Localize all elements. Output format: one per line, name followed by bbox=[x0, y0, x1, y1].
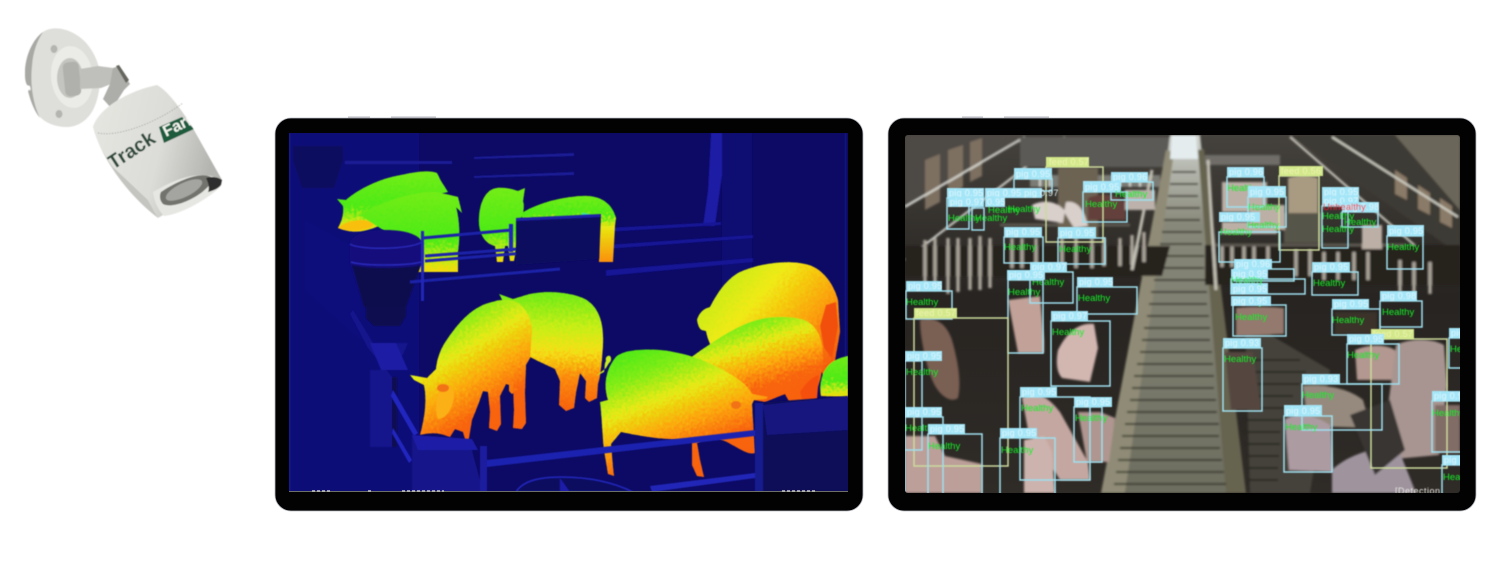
detection: pig middle right: pig 0.95 bbox=[1233, 284, 1267, 294]
detection: pig group top: Healthy bbox=[1115, 189, 1147, 200]
icon: security camera with TrackFarm branding bbox=[25, 28, 222, 218]
thermal pigs lower row bbox=[410, 262, 848, 477]
pigs in pens bbox=[905, 182, 1460, 493]
detection: pig lower right: Healthy bbox=[1450, 344, 1482, 355]
thermal rails and front blocks bbox=[412, 396, 848, 492]
detection: pig middle right: Healthy bbox=[1235, 312, 1267, 323]
pig: upper centre rear view bbox=[479, 188, 525, 262]
detection: pig row two: Healthy bbox=[1008, 287, 1040, 298]
detection: pig row two: Healthy bbox=[1032, 277, 1064, 288]
detection: pig group top right: Healthy bbox=[1387, 242, 1419, 253]
detection: pig group top right: pig 0.97 bbox=[1324, 196, 1358, 206]
pig: upper left rear bbox=[337, 171, 448, 232]
tablet 2 frame bbox=[888, 118, 1476, 511]
feed towers bbox=[1058, 168, 1322, 243]
detection: pig lower right bbox=[1223, 328, 1482, 505]
detection: pig group top: pig 0.96 bbox=[1113, 172, 1147, 182]
detection: pig lower left: pig 0.95 bbox=[930, 424, 964, 434]
detection: pig middle right: pig 0.95 bbox=[1233, 269, 1267, 279]
pig: rear standing middle bbox=[499, 292, 603, 411]
pen fences bbox=[905, 155, 1460, 294]
detection: pig lower left: pig 0.95 bbox=[907, 407, 941, 417]
pig: back right bbox=[697, 262, 840, 390]
pig: upper right behind block bbox=[522, 196, 616, 228]
detection: pig group top right: pig 0.96 bbox=[1229, 167, 1263, 177]
detection: pig row two: pig 0.95 bbox=[1060, 228, 1094, 238]
detection: pig lower left: Healthy bbox=[1075, 413, 1107, 424]
detection: pig group top right: Healthy bbox=[1248, 202, 1280, 213]
detection: pig group top: Healthy bbox=[1085, 199, 1117, 210]
barn upper walls bbox=[905, 135, 1460, 262]
detection: pig group top right bbox=[1219, 167, 1424, 269]
thermal barn background structures bbox=[289, 133, 846, 492]
detection: pig group top right: pig 0.95 bbox=[1221, 212, 1255, 222]
rail upper bbox=[410, 230, 575, 282]
detection: pig group top right: Healthy bbox=[1344, 217, 1376, 228]
detection: feed 4: feed 0.57 bbox=[1373, 329, 1413, 339]
tablet: thermal imaging view bbox=[275, 116, 863, 511]
detection: pig row two: pig 0.95 bbox=[1006, 227, 1040, 237]
thermal pigs upper row bbox=[337, 171, 616, 272]
detection: pig lower right: Healthy bbox=[1432, 408, 1464, 419]
detection: pig lower right: Healthy bbox=[1302, 390, 1334, 401]
detection: feed 2 bbox=[914, 308, 1008, 466]
detection: pig middle right: pig 0.95 bbox=[1334, 299, 1368, 309]
detection: pig lower right: Healthy bbox=[1285, 422, 1317, 433]
detection: pig group top: Healthy bbox=[948, 213, 980, 224]
detection: pig row two: pig 0.95 bbox=[1009, 270, 1043, 280]
detection: pig lower left: Healthy bbox=[906, 367, 938, 378]
detection: pig group top: 0.95 bbox=[987, 197, 1006, 207]
detection: pig middle right: Healthy bbox=[1231, 275, 1263, 286]
detection: pig middle right: Healthy bbox=[1313, 278, 1345, 289]
detection: pig middle right: Healthy bbox=[1231, 297, 1263, 308]
detection: pig row two: Healthy bbox=[1004, 242, 1036, 253]
detection: pig lower right: Healthy bbox=[1443, 472, 1475, 483]
detection: pig group top right: pig 0.95 bbox=[1389, 226, 1423, 236]
detection: pig middle right: pig 0.95 bbox=[1314, 262, 1348, 272]
detection: pig lower left: Healthy bbox=[928, 441, 960, 452]
detection: pig lower left: Healthy bbox=[1052, 327, 1084, 338]
detection: pig lower right: Healthy bbox=[1224, 354, 1256, 365]
detection: pig middle right: pig 0.95 bbox=[1233, 296, 1267, 306]
detection boxes right pen bbox=[1217, 165, 1460, 493]
detection: pig lower left: pig 0.95 bbox=[1022, 387, 1056, 397]
tablet 1 side buttons bbox=[348, 116, 436, 118]
camera logo bbox=[106, 116, 194, 168]
detection: pig row two bbox=[906, 227, 1137, 353]
detection: pig middle right: pig 0.96 bbox=[1236, 259, 1270, 269]
detection: feed 1 bbox=[1046, 157, 1103, 242]
detection: pig lower right: pig 0.95 bbox=[1286, 406, 1320, 416]
detection: pig row two: pig 0.95 bbox=[908, 281, 942, 291]
pen rails left bbox=[350, 310, 408, 447]
detection: pig group top right: Healthy bbox=[1322, 211, 1354, 222]
tablet 2 side buttons bbox=[962, 116, 1049, 118]
detection: pig lower right: pig 0.93 bbox=[1304, 374, 1338, 384]
detection: pig lower left: pig 0.97 bbox=[1053, 311, 1087, 321]
detection: pig row two: Healthy bbox=[1059, 244, 1091, 255]
detection: pig lower left: Healthy bbox=[905, 423, 937, 434]
detection: pig group top right: Healthy bbox=[1220, 227, 1252, 238]
detection: pig row two: Healthy bbox=[1078, 293, 1110, 304]
detection: feed 4 bbox=[1371, 329, 1447, 468]
barn photo scene bbox=[905, 135, 1460, 493]
camera overlay caption: [Detection bbox=[1395, 486, 1441, 496]
camera lens bbox=[153, 175, 222, 216]
detection: feed 3 bbox=[1279, 166, 1323, 250]
detection: pig row two: pig 0.95 bbox=[1079, 277, 1113, 287]
camera logo: Track bbox=[104, 127, 160, 174]
detection: pig group top: pig 0.95 bbox=[1085, 182, 1119, 192]
detection: pig middle right bbox=[1231, 259, 1422, 336]
detection: pig group top right: Healthy bbox=[1227, 183, 1259, 194]
detection: pig group top right: pig 0.95 bbox=[1324, 187, 1358, 197]
camera swivel arm bbox=[57, 58, 130, 109]
barn camera screen bbox=[905, 135, 1482, 505]
tablet: AI health detection view bbox=[888, 116, 1482, 511]
pig: front centre bbox=[600, 350, 768, 477]
detection boxes left pen bbox=[905, 157, 1153, 497]
detection: pig lower right: Healthy bbox=[1347, 350, 1379, 361]
pig: upper left front bbox=[360, 192, 462, 272]
thermal overlay status strip bbox=[289, 491, 848, 492]
detection: pig group top: pig 0.95 bbox=[949, 188, 983, 198]
feeder hopper bbox=[350, 230, 422, 307]
camera logo: Farm bbox=[160, 108, 203, 141]
detection: pig lower right: pig bbox=[1444, 455, 1457, 465]
detection: pig lower left: pig 0.95 bbox=[1002, 428, 1036, 438]
detection: pig lower right: pig 0.95 bbox=[1434, 391, 1468, 401]
detection: pig group top right: Unhealthy bbox=[1323, 202, 1366, 213]
detection: pig group top right: Healthy bbox=[1247, 220, 1279, 231]
detection: pig lower left: pig 0.95 bbox=[907, 351, 941, 361]
central walkway bbox=[1101, 135, 1330, 493]
detection: feed 1: feed 0.57 bbox=[1049, 157, 1089, 167]
thermal feeder and rails upper bbox=[350, 214, 601, 463]
detection: pig lower right: pig 0.95 bbox=[1349, 334, 1383, 344]
detection: feed 2: feed 0.57 bbox=[916, 308, 956, 318]
detection: pig lower right: pig bbox=[1451, 328, 1464, 338]
detection: pig middle right: Healthy bbox=[1382, 307, 1414, 318]
camera wall mount plate bbox=[25, 28, 100, 127]
pig: behind front right bbox=[690, 317, 823, 405]
camera body cylinder bbox=[93, 85, 222, 218]
detection: pig group top right: pig 0.95 bbox=[1250, 187, 1284, 197]
detection: pig middle right: Healthy bbox=[1332, 315, 1364, 326]
detection: feed 3: feed 0.56 bbox=[1281, 166, 1321, 176]
detection: pig row two: Healthy bbox=[906, 297, 938, 308]
detection: pig group top: pig 0.95 pig 0.97 bbox=[987, 188, 1059, 198]
detection: pig group top: Healthy bbox=[988, 205, 1020, 216]
detection: pig group top: Healthy bbox=[975, 213, 1007, 224]
detection: pig group top: Healthy bbox=[1008, 204, 1040, 215]
detection: pig middle right: pig 0.98 bbox=[1382, 291, 1416, 301]
detection: pig lower right: pig 0.93 bbox=[1225, 338, 1259, 348]
tablet 1 frame bbox=[275, 118, 863, 511]
detection: pig group top right: pig 0.98 bbox=[1345, 202, 1379, 212]
detection: pig lower left: Healthy bbox=[1021, 403, 1053, 414]
detection: pig group top: pig 0.97 bbox=[950, 197, 984, 207]
hot orange patches bbox=[436, 302, 838, 419]
detection: pig row two: pig 0.97 bbox=[1032, 262, 1066, 272]
pig: feeding front left bbox=[410, 300, 532, 446]
detection: pig group top right: Healthy bbox=[1322, 224, 1354, 235]
detection: pig lower left: Healthy bbox=[1001, 445, 1033, 456]
detection: pig group top: pig 0.95 bbox=[1016, 169, 1050, 179]
detection: pig lower left: pig 0.95 bbox=[1076, 397, 1110, 407]
detection: pig group top bbox=[947, 168, 1153, 230]
thermal screen bbox=[289, 133, 848, 492]
detection: pig lower left bbox=[905, 311, 1112, 497]
pig: far right edge bbox=[820, 356, 848, 397]
